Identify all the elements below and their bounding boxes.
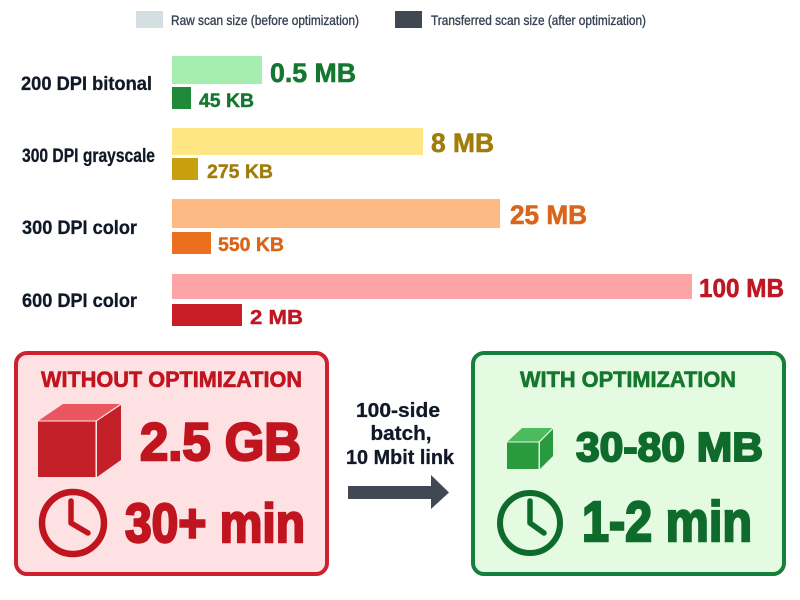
transferred bar [172, 87, 191, 109]
raw value: 100 MB [699, 273, 784, 303]
batch caption: 10 Mbit link [346, 447, 455, 469]
raw bar [172, 56, 262, 84]
row label: 300 DPI color [22, 218, 138, 239]
raw value: 25 MB [510, 200, 587, 230]
value: size: 30-80 MB [576, 424, 763, 470]
icon: large cube [38, 404, 121, 477]
transferred bar [172, 158, 198, 180]
transferred value: 550 KB [218, 234, 284, 256]
transferred value: 275 KB [207, 161, 273, 183]
batch caption: 100-side [356, 400, 440, 422]
raw bar [172, 199, 500, 228]
panel background [473, 353, 784, 574]
icon: clock [42, 492, 104, 554]
panel heading: WITH OPTIMIZATION [520, 367, 736, 392]
raw bar [172, 274, 692, 299]
legend swatch: transferred [395, 11, 422, 28]
transferred bar [172, 304, 242, 326]
panel: without optimization [16, 353, 327, 574]
arrow [348, 475, 449, 509]
transferred value: 2 MB [250, 307, 303, 329]
row: 300 DPI color [22, 199, 587, 256]
panel background [16, 353, 327, 574]
batch caption [346, 400, 455, 469]
transferred bar [172, 232, 211, 254]
row: 200 DPI bitonal [21, 56, 356, 112]
icon: clock [500, 493, 560, 553]
value: size: 2.5 GB [140, 413, 301, 472]
legend swatch: raw [136, 11, 163, 28]
row: 300 DPI grayscale [22, 128, 494, 183]
transferred value: 45 KB [199, 90, 254, 112]
panel heading: WITHOUT OPTIMIZATION [41, 367, 302, 392]
row label: 200 DPI bitonal [21, 74, 152, 95]
row: 600 DPI color [22, 273, 784, 329]
legend label: raw: Raw scan size (before optimization) [171, 12, 359, 28]
raw bar [172, 128, 423, 155]
value: time: 1-2 min [582, 490, 752, 554]
legend [136, 11, 646, 28]
value: time: 30+ min [125, 492, 305, 554]
row label: 600 DPI color [22, 291, 138, 312]
row label: 300 DPI grayscale [22, 146, 155, 167]
icon: small cube [507, 428, 553, 469]
raw value: 0.5 MB [270, 58, 356, 88]
batch caption: batch, [370, 423, 432, 445]
raw value: 8 MB [431, 128, 494, 158]
legend label: transferred: Transferred scan size (after optimization) [431, 12, 646, 28]
panel: with optimization [473, 353, 784, 574]
